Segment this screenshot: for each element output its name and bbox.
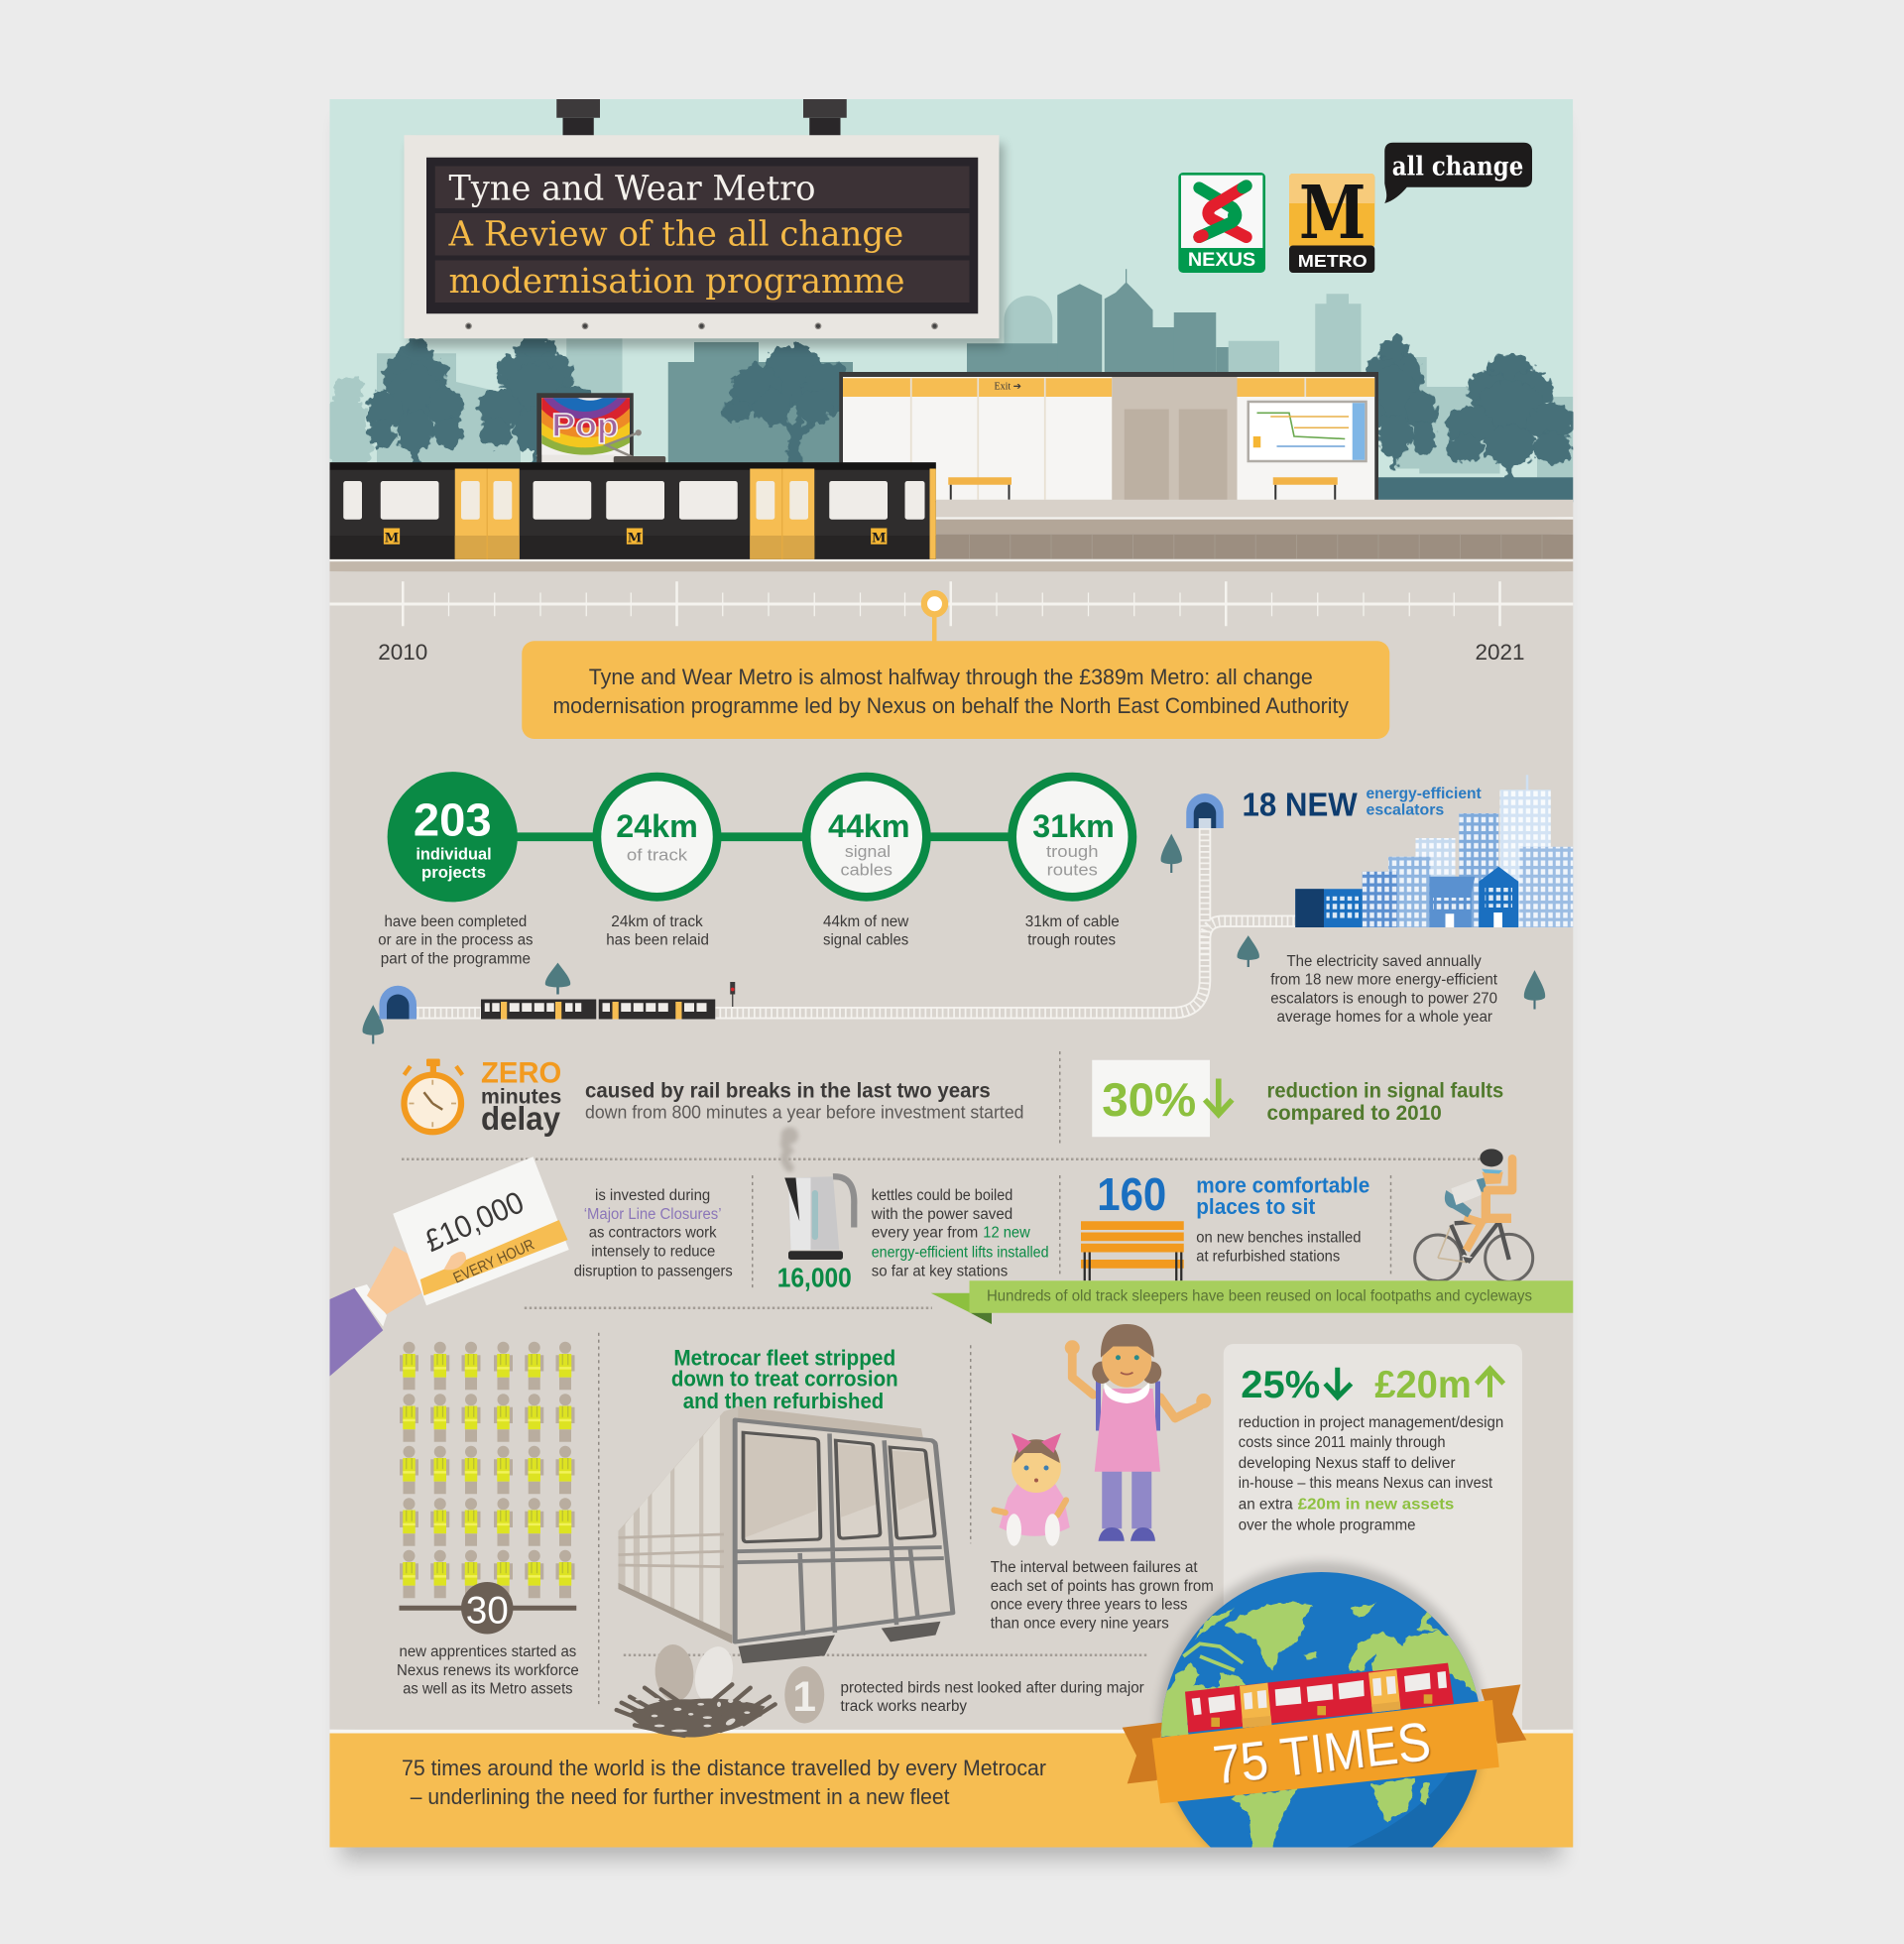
text: 75 times: 75 times around the world is the distance travelled by every Metrocar <box>402 1756 1046 1780</box>
text: points interval: each set of points has grown from <box>991 1578 1214 1595</box>
heading: metrocar: and then refurbished <box>683 1389 884 1413</box>
illustration: girl <box>1065 1324 1211 1541</box>
text: rail breaks: caused by rail breaks in the last two years <box>585 1078 991 1102</box>
text: kettles: so far at key stations <box>872 1263 1008 1279</box>
stat: 30 apprentices <box>399 1582 576 1635</box>
text: electricity saved: average homes for a whole year <box>1277 1009 1492 1026</box>
stat: £20m up: £20m <box>1374 1364 1472 1406</box>
text: signal faults <box>1267 1078 1503 1125</box>
stat: 203 projects: 203 <box>414 794 492 846</box>
captions under circles: signal cables <box>823 932 908 949</box>
ticket: £10,000 every hour: EVERY HOUR <box>451 1237 537 1287</box>
year labels: 2010 <box>378 640 427 665</box>
text: birds nest: track works nearby <box>841 1698 967 1715</box>
globe <box>1157 1572 1488 1892</box>
stat: 160: 160 <box>1097 1168 1166 1220</box>
stat: 31km trough <box>1012 777 1132 897</box>
text: birds nest <box>841 1679 1144 1715</box>
board heading <box>448 169 904 302</box>
tunnels <box>379 793 1224 1020</box>
stat: 30% <box>1092 1060 1232 1137</box>
metro logos <box>384 528 887 546</box>
callout: intro: Tyne and Wear Metro is almost halfway through the £389m Metro: all change <box>589 665 1313 689</box>
captions under circles: 24km of track <box>611 913 703 930</box>
heading: 18 new escalators: escalators <box>1367 801 1445 818</box>
city illustration <box>1295 775 1573 927</box>
text: major line closures: disruption to passengers <box>574 1263 733 1279</box>
card text: reduction in project management/design <box>1239 1414 1503 1431</box>
stat: 203 projects: projects <box>421 864 486 882</box>
captions under circles: has been relaid <box>606 932 709 949</box>
icon: hand and sleeve <box>329 1246 461 1377</box>
text: apprentices: as well as its Metro assets <box>403 1680 573 1697</box>
text: major line closures: is invested during <box>595 1187 710 1204</box>
heading: zero minutes delay: minutes <box>481 1084 561 1108</box>
stat: 30 apprentices: 30 <box>466 1589 509 1632</box>
stat: 44km signal: 44km <box>828 808 910 844</box>
logo: Metro: M <box>1299 171 1367 256</box>
text: kettles: energy-efficient lifts installed <box>872 1245 1049 1262</box>
poster shadow <box>342 119 1561 1860</box>
panel: savings card <box>1224 1344 1522 1741</box>
train doors <box>455 468 936 559</box>
text: apprentices <box>397 1643 579 1698</box>
stat: 31km trough: trough <box>1046 843 1099 861</box>
text: apprentices: Nexus renews its workforce <box>397 1662 579 1679</box>
stat: 203 projects <box>388 772 518 902</box>
card text: costs since 2011 mainly through <box>1239 1434 1446 1451</box>
stat: 30%: 30% <box>1102 1074 1196 1127</box>
stat: 44km signal <box>806 777 926 897</box>
text: electricity saved: from 18 new more energy-efficient <box>1270 972 1498 989</box>
timeline <box>329 581 1573 665</box>
text: points interval: than once every nine years <box>991 1615 1169 1632</box>
timeline: 2021 <box>1475 640 1525 665</box>
stat: 24km track <box>597 777 717 897</box>
logo: Nexus <box>1178 173 1265 273</box>
stat: 16,000: 16,000 <box>777 1262 852 1293</box>
line connector <box>518 832 1008 841</box>
text: major line closures: intensely to reduce <box>591 1243 715 1260</box>
board heading: A Review of the all change <box>448 214 903 254</box>
text: electricity saved: The electricity saved annually <box>1287 953 1482 970</box>
captions under circles: 44km of new <box>823 913 909 930</box>
text: points interval <box>991 1559 1214 1632</box>
ticket: £10,000 every hour: £10,000 <box>419 1184 529 1259</box>
train windows <box>343 481 924 520</box>
text: kettles: with the power saved <box>871 1206 1012 1223</box>
heading: zero minutes delay <box>481 1056 561 1138</box>
network map <box>1248 401 1368 462</box>
signal <box>730 982 735 1007</box>
text: benches: at refurbished stations <box>1196 1248 1340 1265</box>
icon: cyclist <box>1415 1149 1533 1281</box>
icon: kettle <box>781 1127 854 1260</box>
captions under circles: 31km of cable <box>1025 913 1120 930</box>
text: points interval: The interval between failures at <box>991 1559 1198 1576</box>
small trees <box>363 834 1545 1043</box>
stat: 1 egg: 1 <box>792 1674 816 1721</box>
text: kettles: every year from <box>872 1225 978 1242</box>
red metro train <box>1185 1663 1454 1733</box>
ribbon: sleepers <box>931 1280 1573 1324</box>
text: apprentices: new apprentices started as <box>399 1643 576 1660</box>
train <box>329 462 936 559</box>
heading: metrocar: down to treat corrosion <box>671 1367 898 1391</box>
icon: nest and eggs <box>617 1642 775 1738</box>
text: major line closures <box>574 1187 733 1279</box>
mini train <box>481 1000 715 1020</box>
card text: developing Nexus staff to deliver <box>1239 1455 1456 1472</box>
text: signal faults: reduction in signal faults <box>1267 1078 1503 1102</box>
card text: £20m in new assets <box>1298 1496 1455 1513</box>
ribbon: 75 times: 75 TIMES <box>1210 1710 1434 1796</box>
card text: over the whole programme <box>1239 1517 1416 1533</box>
speech bubble: all change: all change <box>1392 151 1523 182</box>
text: major line closures: ‘Major Line Closures’ <box>584 1206 722 1223</box>
heading: zero minutes delay: ZERO <box>481 1056 561 1089</box>
captions under circles: have been completed <box>385 913 527 930</box>
panel: sky and city scene <box>322 99 1575 502</box>
stat: 24km track: of track <box>627 846 688 864</box>
text: electricity saved: escalators is enough to power 270 <box>1270 990 1497 1007</box>
skyline <box>322 269 1573 477</box>
logo: Nexus: NEXUS <box>1188 250 1255 271</box>
ribbon: sleepers: Hundreds of old track sleepers have been reused on local footpaths and cycleways <box>987 1287 1532 1304</box>
trees <box>367 335 1575 480</box>
poster <box>322 99 1575 1892</box>
icon: apprentices grid <box>400 1342 575 1598</box>
text: electricity saved <box>1270 953 1498 1026</box>
text: benches <box>1196 1172 1369 1265</box>
stat: 31km trough: routes <box>1047 861 1098 879</box>
globe shadow <box>1158 1562 1486 1889</box>
text: kettles: 12 new <box>983 1225 1030 1242</box>
text: benches: on new benches installed <box>1196 1230 1361 1247</box>
heading: metrocar <box>671 1345 898 1413</box>
ground strip <box>329 559 1573 571</box>
timeline marker <box>924 593 945 643</box>
advert poster: Pop <box>536 393 634 462</box>
text: major line closures: as contractors work <box>589 1225 717 1242</box>
board heading: Tyne and Wear Metro <box>448 169 815 208</box>
ribbon: 75 times <box>1123 1684 1526 1803</box>
speech bubble: all change <box>1384 143 1532 203</box>
stat: 25% down <box>1241 1364 1351 1406</box>
logo: Metro: METRO <box>1298 251 1368 271</box>
panel: main body background <box>329 571 1573 1730</box>
card text: in-house – this means Nexus can invest <box>1239 1475 1493 1492</box>
board heading: modernisation programme <box>448 262 904 302</box>
station building <box>839 372 1378 502</box>
stat: 31km trough: 31km <box>1032 808 1115 844</box>
text: 75 times <box>402 1756 1046 1809</box>
captions under circles: part of the programme <box>381 950 531 967</box>
light background tree <box>329 376 377 462</box>
board hangers <box>556 99 847 137</box>
text: rail breaks: down from 800 minutes a year before investment started <box>585 1103 1023 1123</box>
text: rail breaks <box>585 1078 1023 1123</box>
text: kettles: kettles could be boiled <box>872 1187 1012 1204</box>
stat: 25% down: 25% <box>1241 1364 1320 1406</box>
captions under circles: trough routes <box>1027 932 1116 949</box>
dividers <box>599 1051 1390 1705</box>
exit sign: Exit ➔ <box>994 382 1021 393</box>
stat: 203 projects: individual <box>416 845 492 863</box>
text: points interval: once every three years to less <box>991 1596 1188 1613</box>
illustration: baby <box>994 1433 1070 1546</box>
bottom band <box>329 1730 1573 1847</box>
heading: 18 new escalators: energy-efficient <box>1367 786 1482 802</box>
icon: bench <box>1081 1221 1184 1280</box>
platform <box>936 500 1573 559</box>
pantograph <box>606 429 665 464</box>
stat: 24km track: 24km <box>616 808 698 844</box>
text: benches: more comfortable <box>1196 1172 1369 1198</box>
heading: zero minutes delay: delay <box>481 1100 560 1138</box>
illustration: stripped metrocar <box>618 1406 953 1663</box>
advert poster: Pop: Pop <box>551 407 619 444</box>
heading: 18 new escalators: 18 NEW <box>1242 786 1358 823</box>
callout: intro <box>522 641 1389 739</box>
text: benches: places to sit <box>1196 1194 1316 1219</box>
text: birds nest: protected birds nest looked after during major <box>841 1679 1144 1696</box>
card text: an extra <box>1239 1496 1293 1513</box>
heading: metrocar: Metrocar fleet stripped <box>673 1345 895 1370</box>
card text <box>1239 1414 1503 1533</box>
stat: 44km signal: cables <box>841 861 892 879</box>
callout: intro: modernisation programme led by Nexus on behalf the North East Combined Authority <box>553 693 1349 718</box>
icon: stopwatch <box>405 1059 462 1132</box>
rail track <box>403 828 1301 1013</box>
captions under circles: or are in the process as <box>378 932 534 949</box>
text: signal faults: compared to 2010 <box>1267 1101 1442 1125</box>
benches <box>948 477 1338 500</box>
stat: 1 egg <box>784 1666 824 1724</box>
ticket: £10,000 every hour <box>393 1156 569 1305</box>
departure board <box>405 135 1004 347</box>
captions under circles <box>378 913 1120 967</box>
text: kettles <box>871 1187 1049 1279</box>
text: 75 times: – underlining the need for further investment in a new fleet <box>411 1784 950 1809</box>
heading: 18 new escalators <box>1242 786 1482 823</box>
stat: 44km signal: signal <box>845 843 891 861</box>
